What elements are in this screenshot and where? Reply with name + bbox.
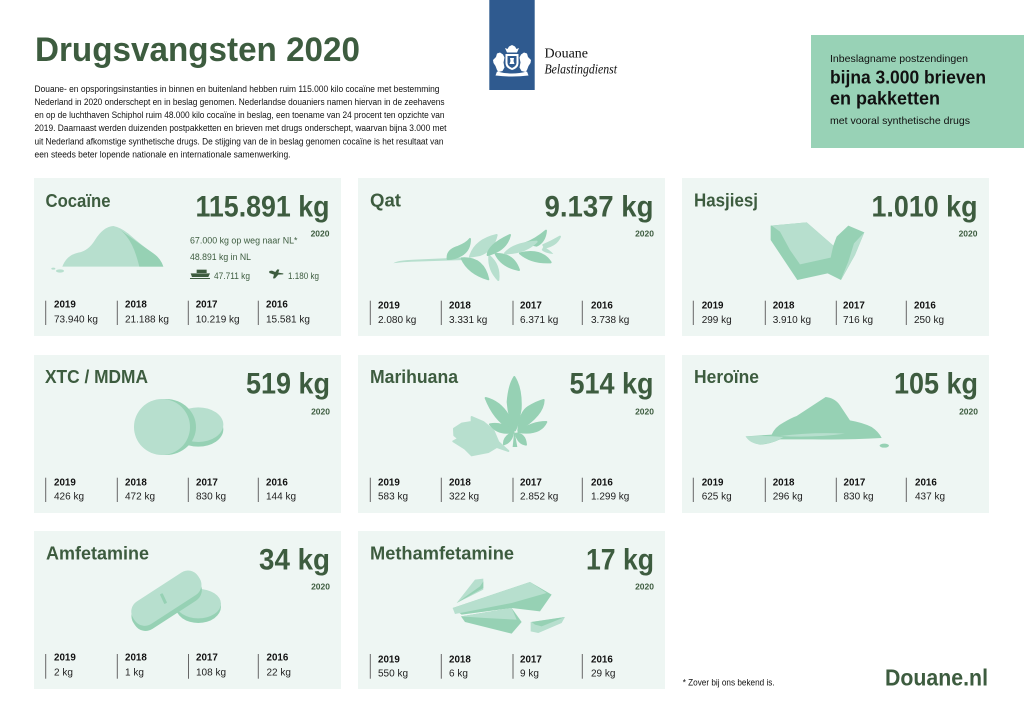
history table: 2017 xyxy=(196,652,218,663)
history table: 550 kg xyxy=(378,669,408,680)
history table: 10.219 kg xyxy=(196,315,240,326)
history table: 2017 xyxy=(520,300,542,311)
history table: 21.188 kg xyxy=(125,315,169,326)
icon: ship xyxy=(190,270,210,279)
history table: 2018 xyxy=(773,300,795,311)
history table: 2018 xyxy=(125,300,147,311)
heading: Cocaïne: Cocaïne xyxy=(46,191,110,211)
history table: 2019 xyxy=(54,477,76,488)
panel: Hasjiesj xyxy=(682,178,989,336)
logo wordmark: Belastingdienst xyxy=(544,62,618,77)
icon: plane xyxy=(269,269,283,278)
intro text block: 2019. Daarnaast werden duizenden postpakketten en brieven met drugs onderschept, waarvan bijna 3.000 met xyxy=(34,123,447,133)
history table: 2016 xyxy=(591,300,613,311)
panel: Heroïne xyxy=(682,355,989,513)
heading: Qat: Qat xyxy=(370,191,401,211)
history table: 3.910 kg xyxy=(773,315,811,326)
history table: 2019 xyxy=(378,654,400,665)
history table xyxy=(46,652,291,679)
history table: 6 kg xyxy=(449,669,468,680)
history table: 2018 xyxy=(125,652,147,663)
history table: 2016 xyxy=(591,477,613,488)
breakdown text: 1.180 kg xyxy=(288,271,319,281)
history table: 2019 xyxy=(702,477,724,488)
history table: 2.080 kg xyxy=(378,315,416,326)
callout: postzendingen: Inbeslagname postzendingen xyxy=(830,53,968,65)
history table: 2019 xyxy=(378,477,400,488)
history table: 2017 xyxy=(520,477,542,488)
heading: Amfetamine: Amfetamine xyxy=(46,544,149,564)
history table: 2019 xyxy=(378,300,400,311)
logo wordmark: Douane xyxy=(544,47,588,62)
history table: 437 kg xyxy=(915,492,945,503)
history table: 472 kg xyxy=(125,492,155,503)
history table: 296 kg xyxy=(773,492,803,503)
breakdown text: 47.711 kg xyxy=(214,271,250,281)
history table: 625 kg xyxy=(702,492,732,503)
history table: 2017 xyxy=(196,300,218,311)
heading: Methamfetamine: Methamfetamine xyxy=(370,544,514,564)
icon: cocaine mound xyxy=(51,226,163,273)
history table: 322 kg xyxy=(449,492,479,503)
icon: heroin mound xyxy=(746,397,889,448)
heading: Hasjiesj: Hasjiesj xyxy=(694,191,758,211)
history table xyxy=(46,300,310,326)
breakdown text: 48.891 kg in NL xyxy=(190,252,251,262)
callout: postzendingen xyxy=(811,35,1024,148)
history table xyxy=(370,300,629,326)
heading: XTC / MDMA: XTC / MDMA xyxy=(45,367,148,387)
intro text block xyxy=(34,84,447,160)
history table: 2017 xyxy=(844,477,866,488)
history table: 2016 xyxy=(591,654,613,665)
panel: Amfetamine xyxy=(34,531,341,689)
figure: 17 kg: 17 kg xyxy=(586,544,654,577)
history table: 108 kg xyxy=(196,667,226,678)
callout: postzendingen: met vooral synthetische drugs xyxy=(830,115,970,127)
panel: XTC / MDMA xyxy=(34,355,341,513)
breakdown text xyxy=(190,236,319,281)
year label 2020: 2020 xyxy=(311,407,330,417)
icon: xtc pills xyxy=(134,399,223,455)
history table: 2018 xyxy=(125,477,147,488)
figure: 105 kg: 105 kg xyxy=(894,368,978,401)
heading: Heroïne: Heroïne xyxy=(694,367,759,387)
history table xyxy=(370,654,615,680)
icon: meth crystals xyxy=(453,579,565,634)
history table: 3.738 kg xyxy=(591,315,629,326)
intro text block: Douane- en opsporingsinstanties in binnen en buitenland hebben ruim 115.000 kilo cocaïne met bestemming xyxy=(34,84,440,94)
figure: 9.137 kg: 9.137 kg xyxy=(544,190,654,224)
history table: 73.940 kg xyxy=(54,315,98,326)
year label 2020: 2020 xyxy=(311,582,330,592)
breakdown text: 67.000 kg op weg naar NL* xyxy=(190,236,298,246)
year label 2020: 2020 xyxy=(635,407,654,417)
footnote: * Zover bij ons bekend is. xyxy=(683,678,775,688)
figure: 115.891 kg: 115.891 kg xyxy=(196,190,330,224)
figure: 514 kg: 514 kg xyxy=(570,368,654,401)
title: Drugsvangsten 2020 xyxy=(35,31,360,69)
history table: 2 kg xyxy=(54,667,73,678)
year label 2020: 2020 xyxy=(635,228,654,238)
history table: 2016 xyxy=(266,477,288,488)
history table: 830 kg xyxy=(196,492,226,503)
history table: 2017 xyxy=(843,300,865,311)
year label 2020: 2020 xyxy=(311,228,330,238)
panel: Qat xyxy=(358,178,665,336)
history table: 2018 xyxy=(449,477,471,488)
history table: 9 kg xyxy=(520,669,539,680)
history table: 2019 xyxy=(54,300,76,311)
history table: 2.852 kg xyxy=(520,492,558,503)
history table xyxy=(693,477,945,503)
history table: 2018 xyxy=(449,654,471,665)
icon: hash block xyxy=(771,222,864,280)
history table: 2016 xyxy=(915,477,937,488)
logo blue ribbon with crest xyxy=(489,0,535,90)
history table: 2017 xyxy=(196,477,218,488)
history table: 299 kg xyxy=(702,315,732,326)
history table: 2019 xyxy=(54,652,76,663)
history table: 426 kg xyxy=(54,492,84,503)
footer link: Douane.nl: Douane.nl xyxy=(885,665,988,691)
history table: 2018 xyxy=(449,300,471,311)
intro text block: Nederland in 2020 onderschept en in beslag genomen. Nederlandse douaniers namen hiervan in de zeehavens xyxy=(34,97,445,107)
figure: 1.010 kg: 1.010 kg xyxy=(872,190,978,224)
history table: 2016 xyxy=(266,300,288,311)
callout: postzendingen: bijna 3.000 brieven xyxy=(830,68,986,88)
logo wordmark xyxy=(544,47,618,77)
history table: 2017 xyxy=(520,654,542,665)
history table: 29 kg xyxy=(591,669,615,680)
panel: Marihuana xyxy=(358,355,665,513)
panel: Methamfetamine xyxy=(358,531,665,689)
history table: 2016 xyxy=(914,300,936,311)
history table: 830 kg xyxy=(844,492,874,503)
history table xyxy=(370,477,629,503)
history table: 2016 xyxy=(266,652,289,663)
year label 2020: 2020 xyxy=(959,407,978,417)
history table: 6.371 kg xyxy=(520,315,558,326)
heading: Marihuana: Marihuana xyxy=(370,367,459,387)
intro text block: en op de luchthaven Schiphol ruim 48.000 kilo cocaïne in beslag, een toename van 24 procent ten opzichte van xyxy=(34,110,445,120)
logo: Douane Belastingdienst xyxy=(489,0,618,90)
history table: 22 kg xyxy=(266,667,291,678)
year label 2020: 2020 xyxy=(959,228,978,238)
icon: amphetamine pills xyxy=(127,566,221,636)
intro text block: een steeds beter lopende nationale en internationale samenwerking. xyxy=(34,150,290,160)
callout: postzendingen: en pakketten xyxy=(830,88,940,108)
figure: 519 kg: 519 kg xyxy=(246,368,330,401)
history table: 1.299 kg xyxy=(591,492,629,503)
icon: cannabis leaf and bud xyxy=(453,377,546,455)
figure: 34 kg: 34 kg xyxy=(259,544,330,577)
panel: Cocaïne xyxy=(34,178,341,336)
history table: 3.331 kg xyxy=(449,315,487,326)
history table: 2018 xyxy=(773,477,795,488)
intro text block: uit Nederland afkomstige synthetische drugs. De stijging van de in beslag genomen cocaïne is het resultaat van xyxy=(34,136,444,146)
history table xyxy=(46,477,296,503)
history table: 144 kg xyxy=(266,492,296,503)
history table: 250 kg xyxy=(914,315,944,326)
year label 2020: 2020 xyxy=(635,582,654,592)
history table: 2019 xyxy=(702,300,724,311)
history table: 716 kg xyxy=(843,315,873,326)
history table: 583 kg xyxy=(378,492,408,503)
history table: 15.581 kg xyxy=(266,315,310,326)
history table: 1 kg xyxy=(125,667,144,678)
history table xyxy=(693,300,944,326)
icon: qat branch xyxy=(393,231,560,280)
